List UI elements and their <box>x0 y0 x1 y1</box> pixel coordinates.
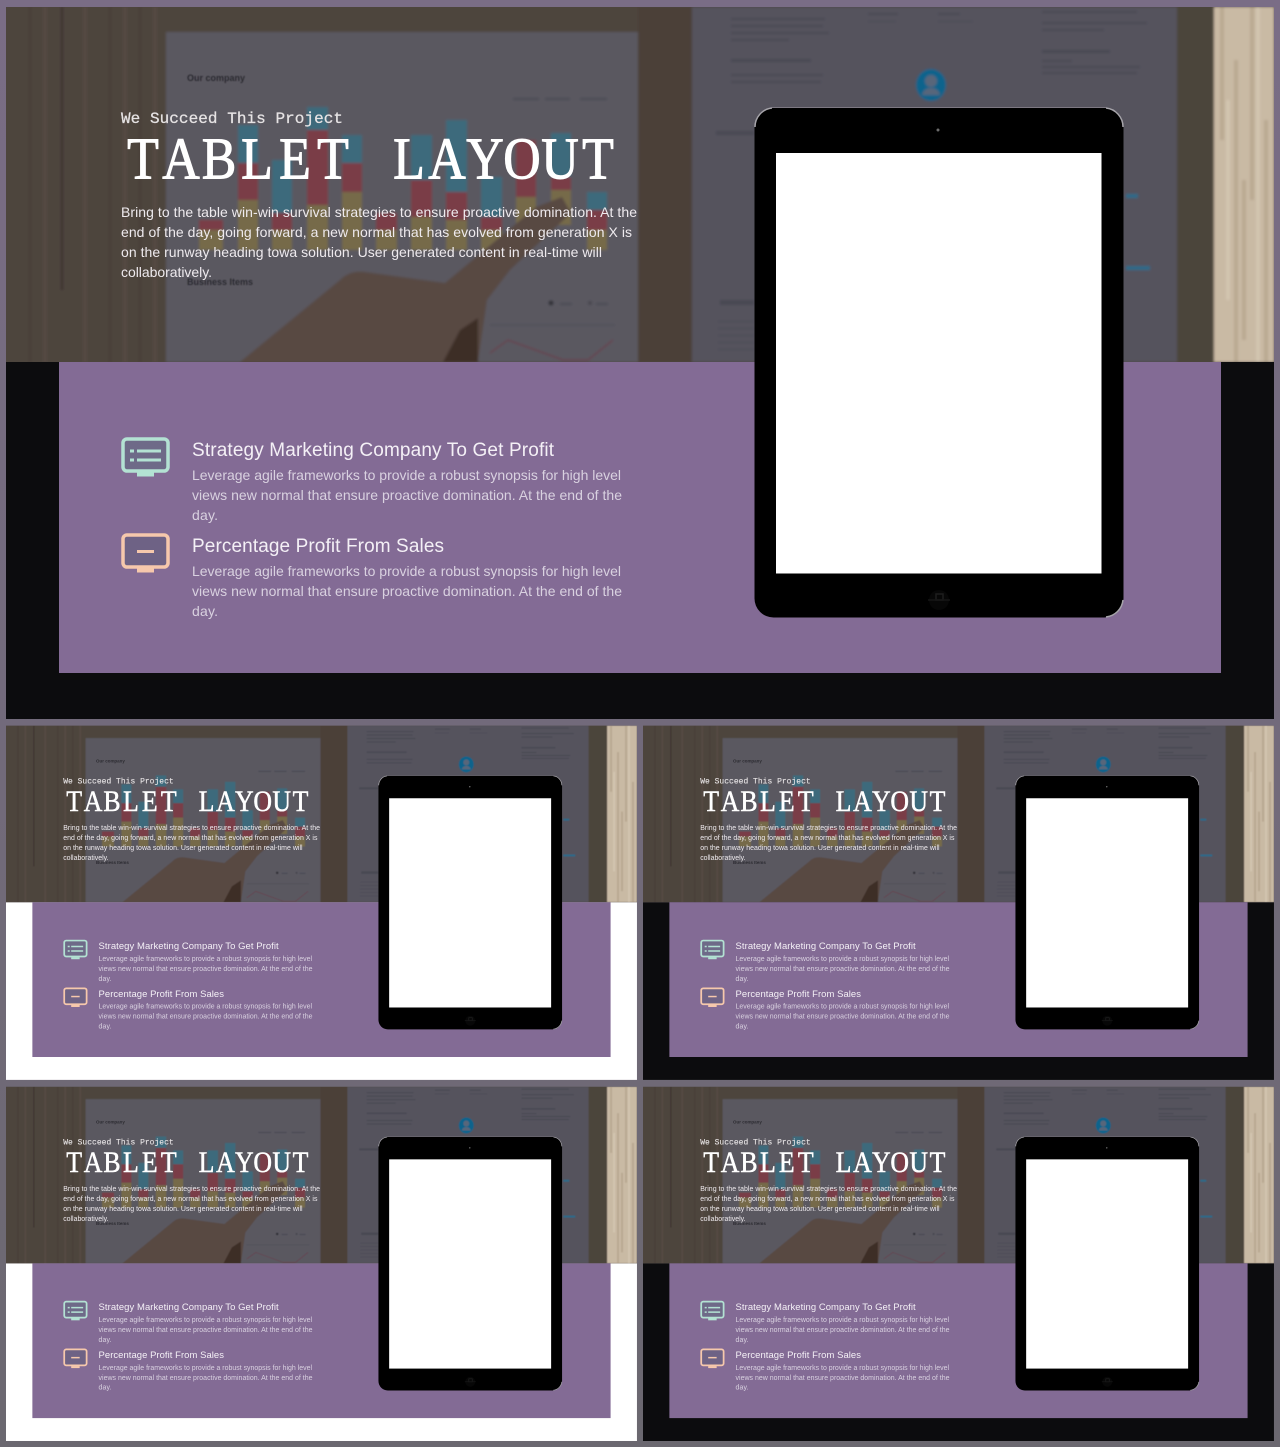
item 2: Percentage Profit From Sales <box>99 1350 224 1361</box>
icon: monitor with minus <box>701 988 724 1007</box>
intro text: Bring to the table win-win survival strategies to ensure proactive domination. At the <box>63 825 320 832</box>
icon: monitor with minus <box>701 1349 724 1368</box>
intro text: collaboratively. <box>63 1216 109 1223</box>
photo: hand pointing at business charts <box>0 0 1280 370</box>
purple panel <box>669 1263 1248 1418</box>
item 1 <box>99 941 313 983</box>
item 2: views new normal that ensure proactive domination. At the end of the <box>736 1375 950 1382</box>
title: TABLET LAYOUT <box>127 126 614 192</box>
slide background <box>643 902 1274 1080</box>
item 2: day. <box>99 1385 112 1392</box>
item 1: views new normal that ensure proactive domination. At the end of the <box>736 966 950 973</box>
purple panel <box>32 1263 611 1418</box>
photo labels: Our company <box>96 1120 125 1125</box>
icon: monitor with minus <box>64 1349 87 1368</box>
eyebrow: We Succeed This Project <box>121 110 343 128</box>
intro text: on the runway heading towa solution. User generated content in real-time will <box>63 845 303 852</box>
photo labels <box>96 758 129 865</box>
intro text <box>121 204 637 280</box>
title: TABLET LAYOUT <box>703 784 946 817</box>
item 2: Percentage Profit From Sales <box>192 536 444 557</box>
item 1: Leverage agile frameworks to provide a robust synopsis for high level <box>99 956 312 963</box>
title: TABLET LAYOUT <box>66 784 309 817</box>
intro text: end of the day, going forward, a new normal that has evolved from generation X is <box>700 835 955 842</box>
item 2: Percentage Profit From Sales <box>99 989 224 1000</box>
item 1: Strategy Marketing Company To Get Profit <box>736 941 916 952</box>
item 1: Strategy Marketing Company To Get Profit <box>192 440 555 461</box>
intro text: collaboratively. <box>121 264 212 280</box>
intro text: on the runway heading towa solution. User generated content in real-time will <box>700 1206 940 1213</box>
intro text: collaboratively. <box>700 1216 746 1223</box>
intro text <box>63 825 320 862</box>
photo labels: Our company <box>96 758 125 763</box>
title: TABLET LAYOUT <box>66 1145 309 1178</box>
item 2: views new normal that ensure proactive domination. At the end of the <box>99 1014 313 1021</box>
intro text: end of the day, going forward, a new normal that has evolved from generation X is <box>63 835 318 842</box>
item 1 <box>736 941 950 983</box>
item 1: views new normal that ensure proactive domination. At the end of the <box>736 1327 950 1334</box>
slide background <box>6 902 637 1080</box>
intro text: on the runway heading towa solution. User generated content in real-time will <box>63 1206 303 1213</box>
item 1: Leverage agile frameworks to provide a robust synopsis for high level <box>736 956 949 963</box>
tablet mockup <box>1015 776 1199 1029</box>
photo labels: Business Items <box>96 860 129 865</box>
photo: hand pointing at business charts <box>3 1083 640 1267</box>
item 1: Leverage agile frameworks to provide a robust synopsis for high level <box>192 467 621 483</box>
item 2: Leverage agile frameworks to provide a robust synopsis for high level <box>99 1365 312 1372</box>
item 1: views new normal that ensure proactive domination. At the end of the <box>99 966 313 973</box>
intro text: Bring to the table win-win survival strategies to ensure proactive domination. At the <box>121 204 637 220</box>
item 2: day. <box>192 603 218 619</box>
photo labels: Business Items <box>96 1221 129 1226</box>
item 2: Percentage Profit From Sales <box>736 1350 861 1361</box>
item 2: views new normal that ensure proactive domination. At the end of the <box>192 583 622 599</box>
title: TABLET LAYOUT <box>703 1145 946 1178</box>
intro text: Bring to the table win-win survival strategies to ensure proactive domination. At the <box>700 825 957 832</box>
item 1: Leverage agile frameworks to provide a robust synopsis for high level <box>99 1317 312 1324</box>
item 1: Strategy Marketing Company To Get Profit <box>736 1302 916 1313</box>
intro text: end of the day, going forward, a new normal that has evolved from generation X is <box>700 1196 955 1203</box>
item 1: Strategy Marketing Company To Get Profit <box>99 941 279 952</box>
intro text: Bring to the table win-win survival strategies to ensure proactive domination. At the <box>63 1186 320 1193</box>
intro text: collaboratively. <box>63 855 109 862</box>
item 1: views new normal that ensure proactive domination. At the end of the <box>99 1327 313 1334</box>
icon: monitor with list <box>701 941 724 959</box>
purple panel <box>59 362 1221 673</box>
slide background <box>643 1263 1274 1441</box>
intro text: on the runway heading towa solution. User generated content in real-time will <box>121 244 602 260</box>
item 1 <box>736 1302 950 1344</box>
tablet mockup <box>754 108 1124 618</box>
item 1 <box>192 440 622 523</box>
item 1: day. <box>192 507 218 523</box>
tablet mockup <box>378 776 562 1029</box>
purple panel <box>669 902 1248 1057</box>
icon: monitor with list <box>123 439 168 476</box>
tablet mockup <box>1015 1137 1199 1390</box>
purple panel <box>32 902 611 1057</box>
item 1: Leverage agile frameworks to provide a robust synopsis for high level <box>736 1317 949 1324</box>
photo labels: Business Items <box>733 1221 766 1226</box>
item 2: Percentage Profit From Sales <box>736 989 861 1000</box>
slide: small layout on black, row 2 right <box>640 1083 1277 1441</box>
slide: small layout on black, row 1 right <box>640 722 1277 1080</box>
photo: hand pointing at business charts <box>3 722 640 906</box>
item 2 <box>736 1350 950 1392</box>
icon: monitor with minus <box>64 988 87 1007</box>
item 1: day. <box>736 1337 749 1344</box>
intro text <box>63 1186 320 1223</box>
slide: small layout on white, row 1 left <box>3 722 640 1080</box>
photo labels: Business Items <box>733 860 766 865</box>
item 1: views new normal that ensure proactive domination. At the end of the <box>192 487 622 503</box>
item 2: views new normal that ensure proactive domination. At the end of the <box>736 1014 950 1021</box>
photo labels: Our company <box>187 73 245 83</box>
item 2 <box>99 989 313 1031</box>
intro text <box>700 1186 957 1223</box>
item 1: day. <box>99 976 112 983</box>
item 1: day. <box>99 1337 112 1344</box>
intro text: Bring to the table win-win survival strategies to ensure proactive domination. At the <box>700 1186 957 1193</box>
item 1: day. <box>736 976 749 983</box>
item 2 <box>736 989 950 1031</box>
item 1: Strategy Marketing Company To Get Profit <box>99 1302 279 1313</box>
icon: monitor with list <box>64 1302 87 1320</box>
slide background <box>6 362 1274 719</box>
icon: monitor with list <box>64 941 87 959</box>
intro text: collaboratively. <box>700 855 746 862</box>
photo labels <box>96 1120 129 1226</box>
photo labels <box>187 73 253 287</box>
item 1 <box>99 1302 313 1344</box>
intro text: end of the day, going forward, a new normal that has evolved from generation X is <box>121 224 632 240</box>
item 2: day. <box>99 1024 112 1031</box>
photo: hand pointing at business charts <box>640 722 1277 906</box>
item 2: Leverage agile frameworks to provide a robust synopsis for high level <box>736 1004 949 1011</box>
photo labels: Our company <box>733 758 762 763</box>
eyebrow: We Succeed This Project <box>700 777 811 786</box>
eyebrow: We Succeed This Project <box>63 1138 174 1147</box>
item 2: Leverage agile frameworks to provide a robust synopsis for high level <box>736 1365 949 1372</box>
item 2: day. <box>736 1385 749 1392</box>
intro text: end of the day, going forward, a new normal that has evolved from generation X is <box>63 1196 318 1203</box>
photo labels: Our company <box>733 1120 762 1125</box>
slide: small layout on white, row 2 left <box>3 1083 640 1441</box>
slide: main large layout on black <box>0 0 1280 719</box>
photo labels <box>733 1120 766 1226</box>
item 2 <box>99 1350 313 1392</box>
icon: monitor with minus <box>123 535 168 572</box>
slide background <box>6 1263 637 1441</box>
item 2: Leverage agile frameworks to provide a robust synopsis for high level <box>99 1004 312 1011</box>
photo labels <box>733 758 766 865</box>
item 2: day. <box>736 1024 749 1031</box>
photo: hand pointing at business charts <box>640 1083 1277 1267</box>
tablet mockup <box>378 1137 562 1390</box>
icon: monitor with list <box>701 1302 724 1320</box>
eyebrow: We Succeed This Project <box>700 1138 811 1147</box>
item 2 <box>192 536 622 619</box>
item 2: views new normal that ensure proactive domination. At the end of the <box>99 1375 313 1382</box>
photo labels: Business Items <box>187 277 253 287</box>
intro text <box>700 825 957 862</box>
item 2: Leverage agile frameworks to provide a robust synopsis for high level <box>192 563 621 579</box>
intro text: on the runway heading towa solution. User generated content in real-time will <box>700 845 940 852</box>
eyebrow: We Succeed This Project <box>63 777 174 786</box>
